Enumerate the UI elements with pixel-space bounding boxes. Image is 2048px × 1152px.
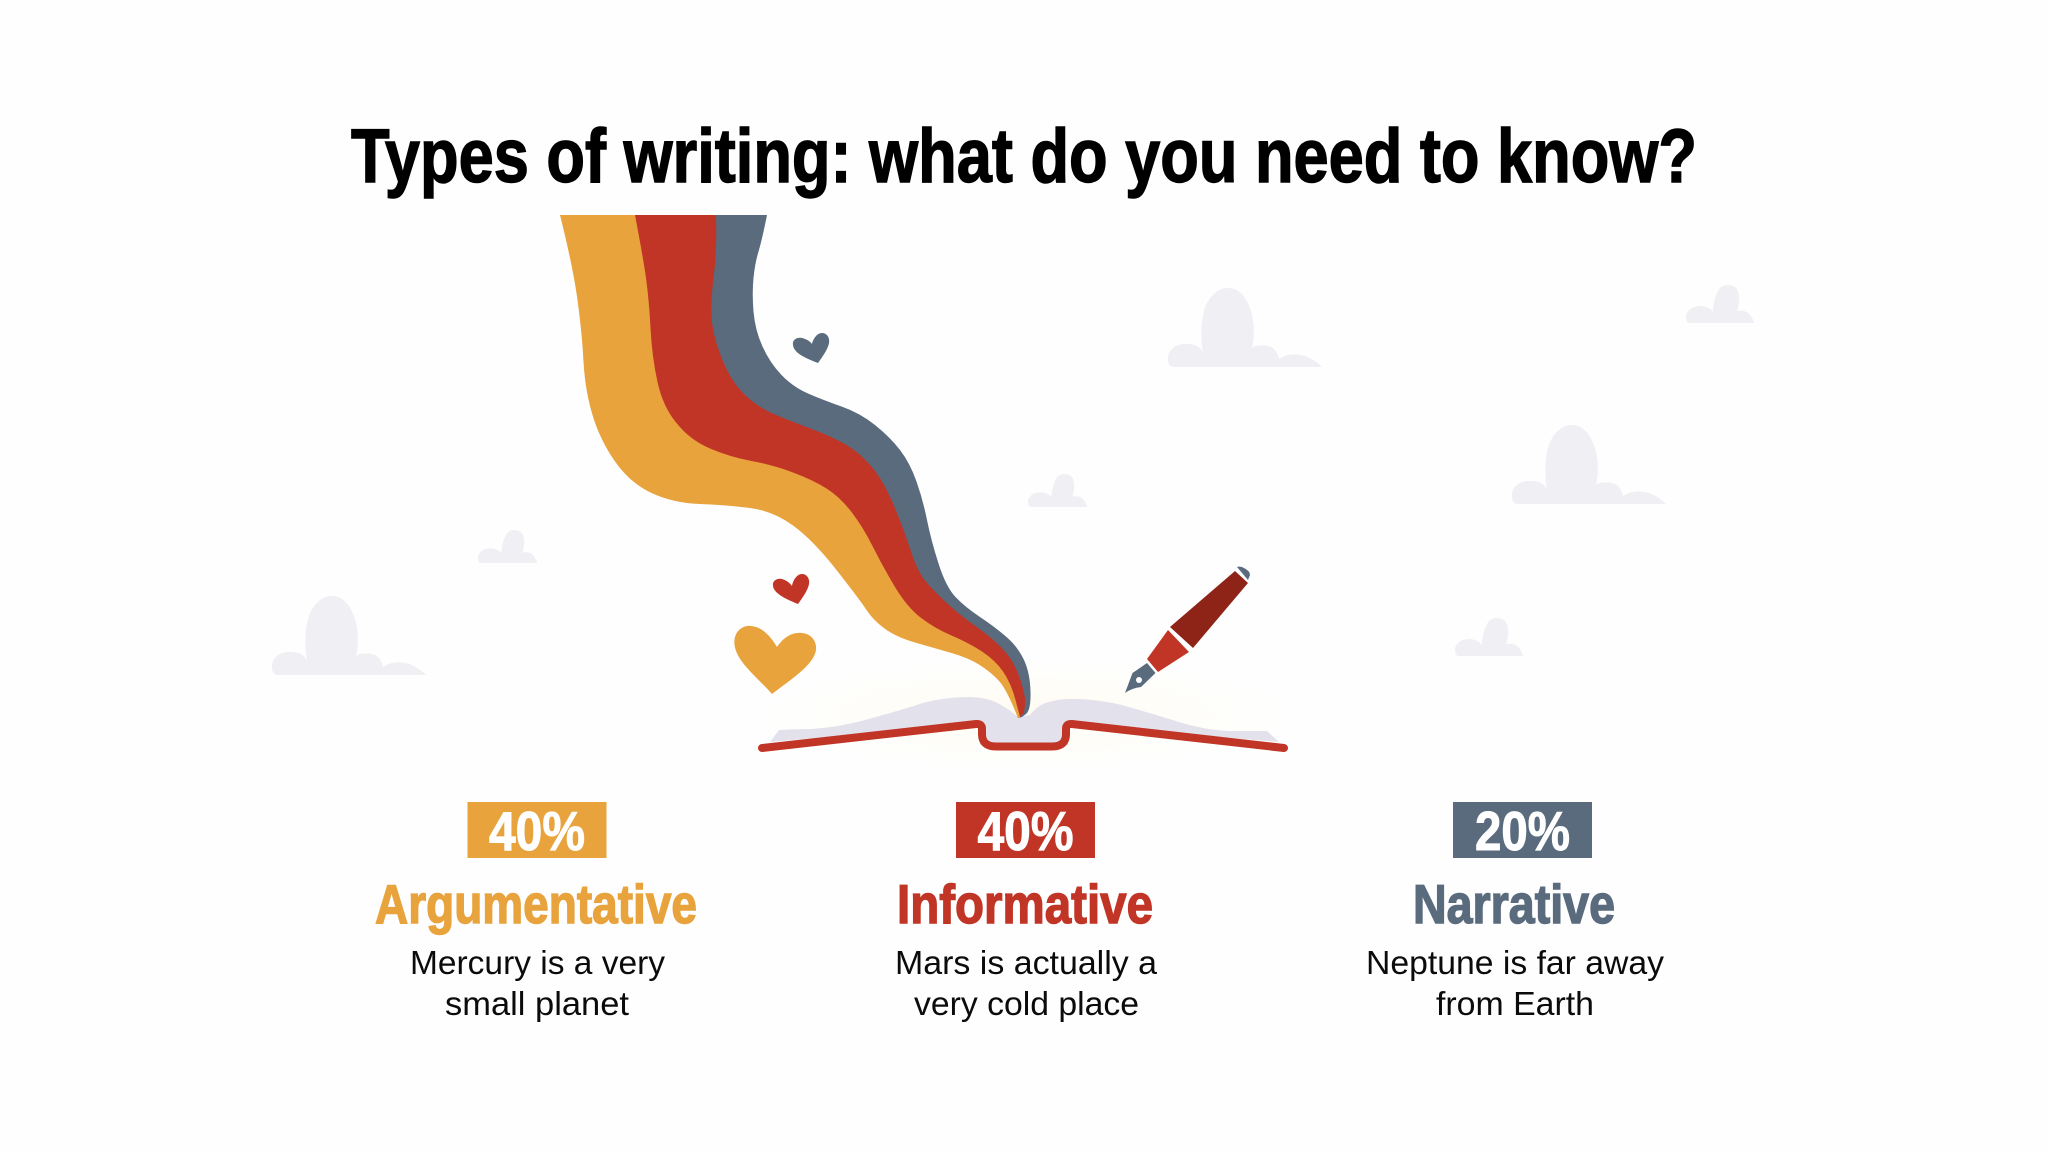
column: narrative <box>1366 800 1665 1022</box>
cloud: small left <box>478 530 537 563</box>
cloud: small centre <box>1028 474 1087 507</box>
background clouds <box>272 285 1754 675</box>
description: Mercury: small planet <box>445 985 629 1022</box>
cloud: large top centre <box>1168 288 1322 367</box>
heading: Informative: Informative <box>897 873 1153 935</box>
badge: 40% red: 40% <box>978 800 1074 862</box>
description: Mars: very cold place <box>914 985 1139 1022</box>
column: argumentative <box>375 800 697 1022</box>
description: Mars <box>895 944 1158 1022</box>
icon: red heart <box>773 574 809 604</box>
book cover line <box>762 724 1284 748</box>
badge: 20% grey: 20% <box>1475 800 1570 862</box>
cloud: large right <box>1512 425 1666 504</box>
ribbon band: argumentative yellow <box>560 215 1020 718</box>
icon: yellow heart <box>734 626 816 694</box>
heading: Narrative: Narrative <box>1413 873 1615 935</box>
description: Mars: Mars is actually a <box>895 944 1158 981</box>
ribbon rising from book <box>560 215 1031 718</box>
description: Mercury: Mercury is a very <box>410 944 665 981</box>
description: Neptune: Neptune is far away <box>1366 944 1665 981</box>
cloud: small right <box>1455 618 1523 656</box>
heading: Argumentative: Argumentative <box>375 873 697 935</box>
badge: 40% yellow: 40% <box>489 800 585 862</box>
book <box>755 660 1295 770</box>
icon: grey heart <box>793 333 829 363</box>
title: Types of writing: what do you need to know? <box>351 114 1697 199</box>
cloud: large left <box>272 596 426 675</box>
icon: fountain pen <box>1125 567 1250 693</box>
column: informative <box>895 800 1158 1022</box>
book pages <box>770 697 1279 745</box>
cloud: small top right <box>1686 285 1754 323</box>
description: Neptune: from Earth <box>1436 985 1594 1022</box>
ribbon band: informative red <box>600 215 1025 718</box>
description: Mercury <box>410 944 665 1022</box>
description: Neptune <box>1366 944 1665 1022</box>
ribbon band: narrative grey <box>600 215 1031 718</box>
